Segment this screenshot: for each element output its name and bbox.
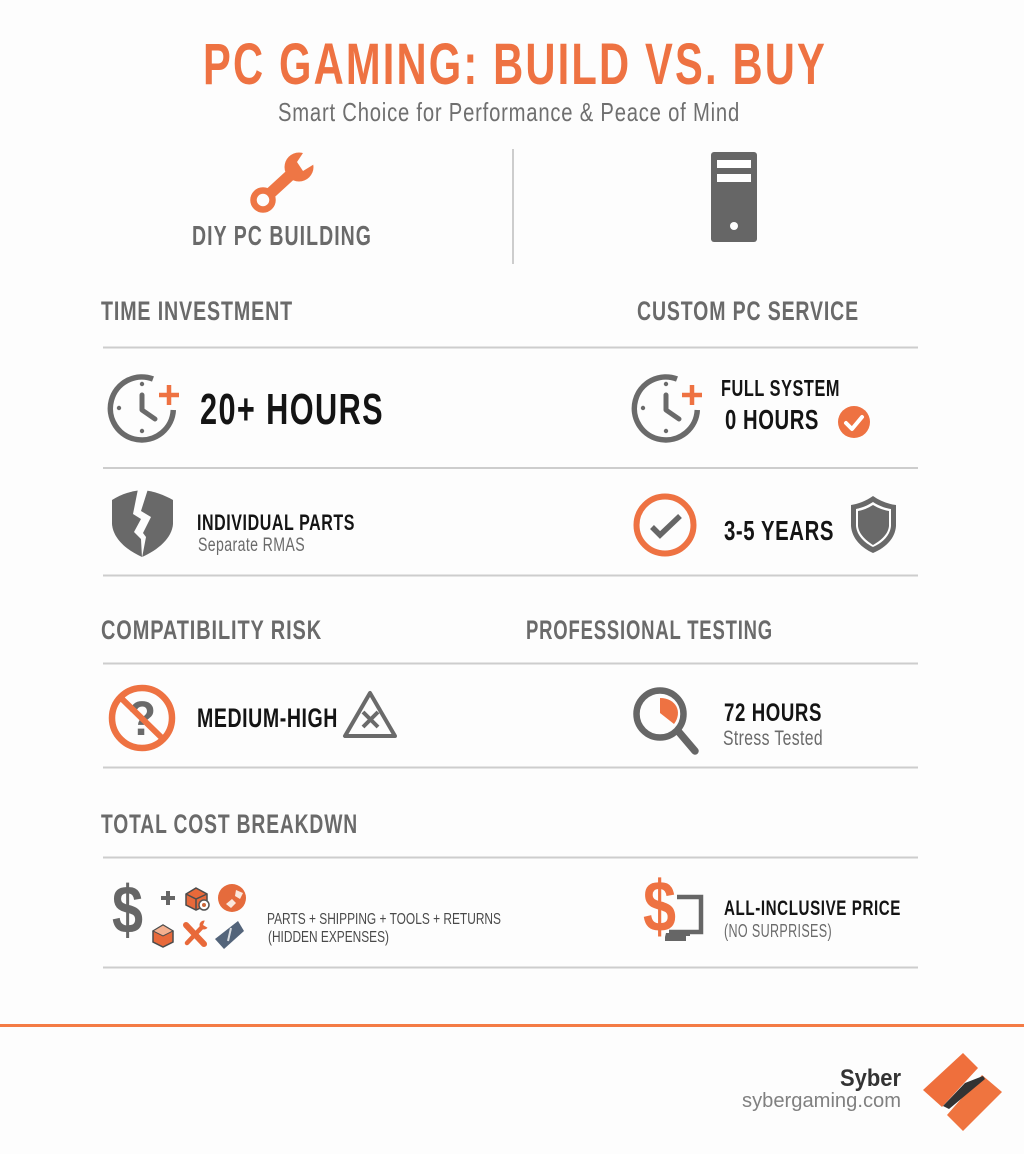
value: 3-5 years: 3-5 YEARS bbox=[724, 515, 834, 546]
heading: DIY PC building: DIY PC BUILDING bbox=[192, 220, 372, 251]
heading: time investment: TIME INVESTMENT bbox=[101, 296, 293, 326]
heading: custom PC service: CUSTOM PC SERVICE bbox=[637, 296, 859, 326]
icon: parts cube bbox=[153, 925, 173, 947]
value: medium-high: MEDIUM-HIGH bbox=[197, 703, 338, 733]
value: full system: FULL SYSTEM bbox=[721, 375, 840, 401]
heading: compatibility risk: COMPATIBILITY RISK bbox=[101, 615, 322, 645]
icon: broken shield bbox=[112, 489, 173, 558]
value: all-inclusive price: ALL-INCLUSIVE PRICE bbox=[724, 897, 901, 920]
brand URL: sybergaming.com bbox=[742, 1090, 901, 1112]
value: 20+ hours: 20+ HOURS bbox=[200, 385, 384, 434]
icon: tools bbox=[186, 920, 210, 944]
icon: dollar and monitor bbox=[643, 867, 701, 947]
heading: professional testing: PROFESSIONAL TESTING bbox=[526, 615, 773, 645]
note: stress tested: Stress Tested bbox=[723, 727, 823, 750]
icon: dollar and monitor: $ bbox=[643, 867, 676, 947]
text: parts and hidden expenses bbox=[267, 911, 501, 946]
icon: PC tower bbox=[711, 152, 757, 242]
icon: clock plus (service) bbox=[634, 377, 702, 440]
icon: warranty shield bbox=[851, 496, 896, 553]
heading: total cost breakdown: TOTAL COST BREAKDWN bbox=[101, 809, 358, 839]
icon: no-question sign: ? bbox=[128, 693, 156, 746]
icon: return ticket bbox=[215, 921, 244, 949]
value: 72 hours: 72 HOURS bbox=[724, 699, 822, 727]
icon: magnifier bbox=[636, 690, 695, 751]
brand name: Syber bbox=[840, 1065, 901, 1092]
value: 0 hours: 0 HOURS bbox=[725, 404, 819, 435]
icon: globe bbox=[218, 884, 246, 912]
icon: plus bbox=[161, 891, 175, 905]
icon: warning triangle bbox=[345, 693, 395, 736]
icon: clock plus (DIY) bbox=[110, 377, 179, 440]
icon: orange check badge bbox=[838, 406, 870, 438]
icon: dollar with hidden costs bbox=[112, 872, 246, 949]
footer rule bbox=[0, 1024, 1024, 1027]
value: individual parts: INDIVIDUAL PARTS bbox=[197, 510, 355, 535]
subtitle: Smart Choice for Performance & Peace of Mind bbox=[278, 97, 740, 127]
text: parts and hidden expenses: (HIDDEN EXPENSES) bbox=[268, 929, 389, 946]
icon: ring check bbox=[636, 496, 694, 554]
text: parts and hidden expenses: PARTS + SHIPPING + TOOLS + RETURNS bbox=[267, 911, 501, 928]
icon: no-question sign bbox=[112, 688, 172, 748]
note: no surprises: (NO SURPRISES) bbox=[724, 921, 832, 941]
icon: wrench bbox=[254, 146, 322, 210]
icon: grey dollar: $ bbox=[112, 872, 143, 948]
note: separate RMAs: Separate RMAS bbox=[198, 535, 305, 556]
logo bbox=[923, 1053, 1002, 1131]
icon: shipping box bbox=[186, 888, 209, 910]
